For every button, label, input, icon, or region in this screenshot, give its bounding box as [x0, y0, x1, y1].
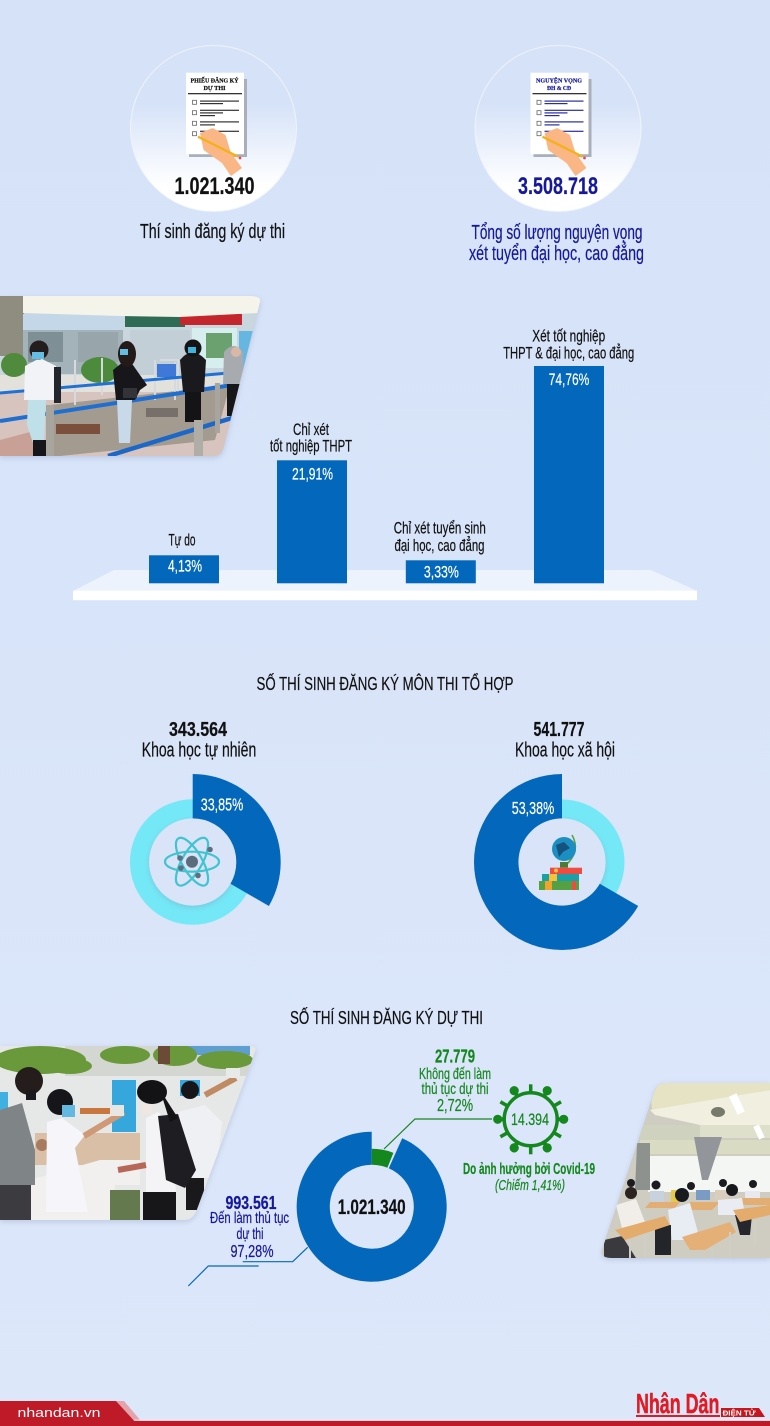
- donut: natural sciences 33.85%: 33,85%: [201, 795, 243, 815]
- callout: attending candidates: Đến làm thủ tục: [210, 1210, 289, 1227]
- callout: covid reason: [463, 1161, 595, 1194]
- callout: absent candidates: thủ tục dự thi: [422, 1081, 488, 1098]
- donut: attending 97.28%: [297, 1132, 447, 1282]
- icon: registration form: DỰ THI: [204, 85, 226, 92]
- heading: combined subjects: SỐ THÍ SINH ĐĂNG KÝ MÔN THI TỔ HỢP: [256, 673, 514, 694]
- callout: absent candidates: Không đến làm: [419, 1066, 491, 1083]
- photo: students queueing: [0, 296, 265, 458]
- bar chart: registration purpose: [73, 327, 697, 600]
- bar: Chỉ xét tuyển sinh: 3,33%: [424, 562, 459, 581]
- bar: Chỉ xét tuyển sinh: Chỉ xét tuyển sinh: [394, 519, 486, 538]
- panel: registered candidates: [130, 46, 296, 243]
- photo: temperature check: [0, 1044, 260, 1222]
- circle badge left: [130, 46, 296, 212]
- number and name: natural sciences: [142, 719, 256, 762]
- bar: Tự do: [149, 531, 219, 583]
- bar: Xét tốt nghiệp THPT và đại học: [503, 327, 634, 583]
- chart platform: [73, 570, 697, 600]
- callout: covid reason: (Chiếm 1,41%): [495, 1177, 565, 1194]
- donut center total: 1.021.340: [338, 1196, 406, 1219]
- callout: attending candidates: 97,28%: [230, 1241, 274, 1261]
- callout: absent candidates: 27.779: [435, 1047, 475, 1067]
- callout: attending candidates: 993.561: [226, 1193, 276, 1213]
- heading: candidates attending: SỐ THÍ SINH ĐĂNG KÝ DỰ THI: [290, 1007, 483, 1028]
- number and name: natural sciences: 343.564: [169, 719, 228, 741]
- bar: Xét tốt nghiệp THPT và đại học: Xét tốt nghiệp: [532, 327, 605, 346]
- bar: Chỉ xét tốt nghiệp THPT: [270, 420, 352, 583]
- donut: natural sciences 33.85%: [140, 774, 281, 915]
- icon: globe and books: [539, 835, 582, 890]
- photo: exam room: [595, 1083, 770, 1259]
- donut: social sciences 53.38%: 53,38%: [512, 798, 554, 818]
- bar: Tự do: Tự do: [168, 531, 196, 550]
- panel: donut total candidates: [297, 1132, 447, 1282]
- label: registered candidates: Thí sinh đăng ký dự thi: [140, 221, 285, 243]
- bar: Chỉ xét tốt nghiệp THPT: 21,91%: [292, 464, 333, 483]
- logo: Nhân Dân điện tử: ĐIỆN TỬ: [722, 1408, 756, 1418]
- number and name: social sciences: [515, 719, 615, 762]
- bar: Chỉ xét tuyển sinh: đại học, cao đẳng: [394, 536, 484, 555]
- bar: Chỉ xét tốt nghiệp THPT: tốt nghiệp THPT: [270, 437, 352, 456]
- number: total wishes: 3.508.718: [518, 173, 598, 200]
- number and name: social sciences: 541.777: [534, 719, 584, 741]
- callout: absent candidates: [419, 1047, 491, 1115]
- bar: Tự do: 4,13%: [168, 557, 202, 576]
- bar: Xét tốt nghiệp THPT và đại học: 74,76%: [549, 370, 589, 389]
- bar: Chỉ xét tốt nghiệp THPT: Chỉ xét: [293, 420, 329, 439]
- logo: Nhân Dân điện tử: Nhân Dân: [636, 1388, 719, 1419]
- icon: covid virus with count: 14.394: [511, 1111, 549, 1129]
- bar: Xét tốt nghiệp THPT và đại học: THPT & đại học, cao đẳng: [503, 344, 634, 363]
- callout: attending candidates: dự thi: [236, 1226, 264, 1243]
- icon: covid virus with count: [493, 1084, 568, 1154]
- number: registered candidates: 1.021.340: [174, 173, 254, 200]
- callout: absent candidates: 2,72%: [437, 1095, 473, 1115]
- donut: social sciences 53.38%: [474, 774, 638, 950]
- icon: registration form: PHIẾU ĐĂNG KÝ: [190, 76, 239, 84]
- icon: atom: [165, 833, 219, 890]
- icon: registration form: [186, 73, 247, 176]
- arrow: absent connector line: [384, 1119, 492, 1149]
- donut: absent 2.72%: [372, 1149, 393, 1168]
- panel: social sciences: [474, 719, 638, 950]
- panel: total wishes: [469, 46, 644, 265]
- number and name: social sciences: Khoa học xã hội: [515, 740, 615, 762]
- footer site name: nhandan.vn: [18, 1405, 100, 1420]
- callout: covid reason: Do ảnh hưởng bởi Covid-19: [463, 1161, 595, 1178]
- icon: wishes form: [530, 73, 592, 176]
- arrow: attending connector lines: [188, 1247, 308, 1286]
- icon: wishes form: ĐH & CĐ: [547, 86, 572, 92]
- number and name: natural sciences: Khoa học tự nhiên: [142, 740, 256, 762]
- footer band: [0, 1401, 770, 1426]
- label: total wishes: Tổng số lượng nguyện vọng: [472, 222, 642, 244]
- label: total wishes: xét tuyển đại học, cao đẳng: [469, 241, 644, 265]
- circle badge right: [475, 46, 641, 212]
- callout: attending candidates: [210, 1193, 289, 1261]
- panel: natural sciences: [140, 719, 281, 915]
- bar: Chỉ xét tuyển sinh: [394, 519, 486, 583]
- label: total wishes: [469, 222, 644, 265]
- icon: wishes form: NGUYỆN VỌNG: [536, 76, 582, 84]
